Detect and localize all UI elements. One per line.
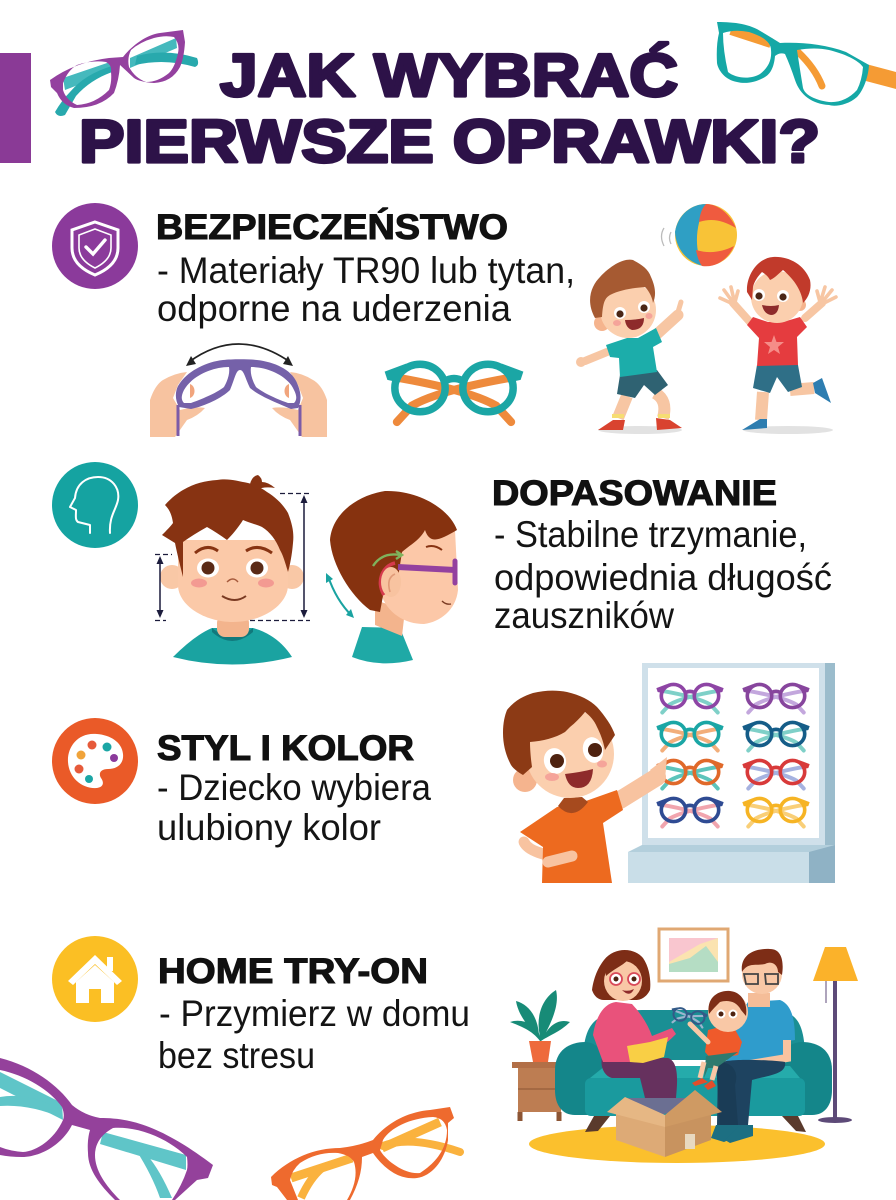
text: safety description: odporne na uderzenia <box>157 288 511 329</box>
text: home try-on description: - Przymierz w domu <box>159 993 470 1034</box>
decoration: teal glasses top right <box>717 22 896 106</box>
icon: palette <box>52 718 138 804</box>
text: fit description <box>494 514 832 636</box>
text: style description <box>157 767 431 848</box>
text: safety description: - Materiały TR90 lub tytan, <box>157 250 575 291</box>
heading: style: STYL I KOLOR <box>157 729 414 768</box>
title <box>79 42 820 175</box>
arrow: temple length <box>326 573 354 618</box>
illustration: child face front <box>160 475 304 664</box>
text: safety description <box>157 250 575 329</box>
title: JAK WYBRAĆ <box>220 42 678 109</box>
title: PIERWSZE OPRAWKI? <box>79 108 820 175</box>
heading: home try-on: HOME TRY-ON <box>158 952 428 991</box>
illustration: box of glasses <box>607 1090 722 1157</box>
heading: fit: DOPASOWANIE <box>492 474 777 513</box>
text: fit description: odpowiednia długość <box>494 557 832 598</box>
illustration: ball <box>662 204 737 266</box>
heading: safety: BEZPIECZEŃSTWO <box>156 207 508 247</box>
illustration: family on sofa <box>510 929 858 1163</box>
panel: fit <box>52 462 832 664</box>
glasses grid <box>656 684 810 826</box>
illustration: boy pointing <box>576 260 682 434</box>
measure arrows: front <box>155 494 310 620</box>
icon: head profile <box>52 462 138 548</box>
text: style description: - Dziecko wybiera <box>157 767 431 808</box>
text: home try-on description: bez stresu <box>158 1035 315 1076</box>
illustration: hands flexing glasses <box>150 344 327 437</box>
icon: house <box>52 936 138 1022</box>
accent bar <box>0 53 31 163</box>
text: home try-on description <box>158 993 470 1076</box>
decoration: purple glasses top left <box>50 30 198 116</box>
panel: safety <box>52 203 836 437</box>
illustration: child pointing at glasses <box>503 691 667 883</box>
illustration: child head side with glasses <box>330 491 458 663</box>
panel: style and colour <box>52 663 835 883</box>
decoration: purple glasses bottom left <box>0 1058 213 1200</box>
decoration: orange glasses bottom right <box>271 1107 460 1200</box>
text: style description: ulubiony kolor <box>157 807 381 848</box>
illustration: boy jumping <box>720 257 836 434</box>
text: fit description: - Stabilne trzymanie, <box>494 514 807 555</box>
illustration: display board <box>628 663 835 883</box>
icon: shield <box>52 203 138 289</box>
panel: home try-on <box>52 929 858 1163</box>
illustration: teal flexible glasses <box>385 364 523 422</box>
text: fit description: zauszników <box>494 595 674 636</box>
